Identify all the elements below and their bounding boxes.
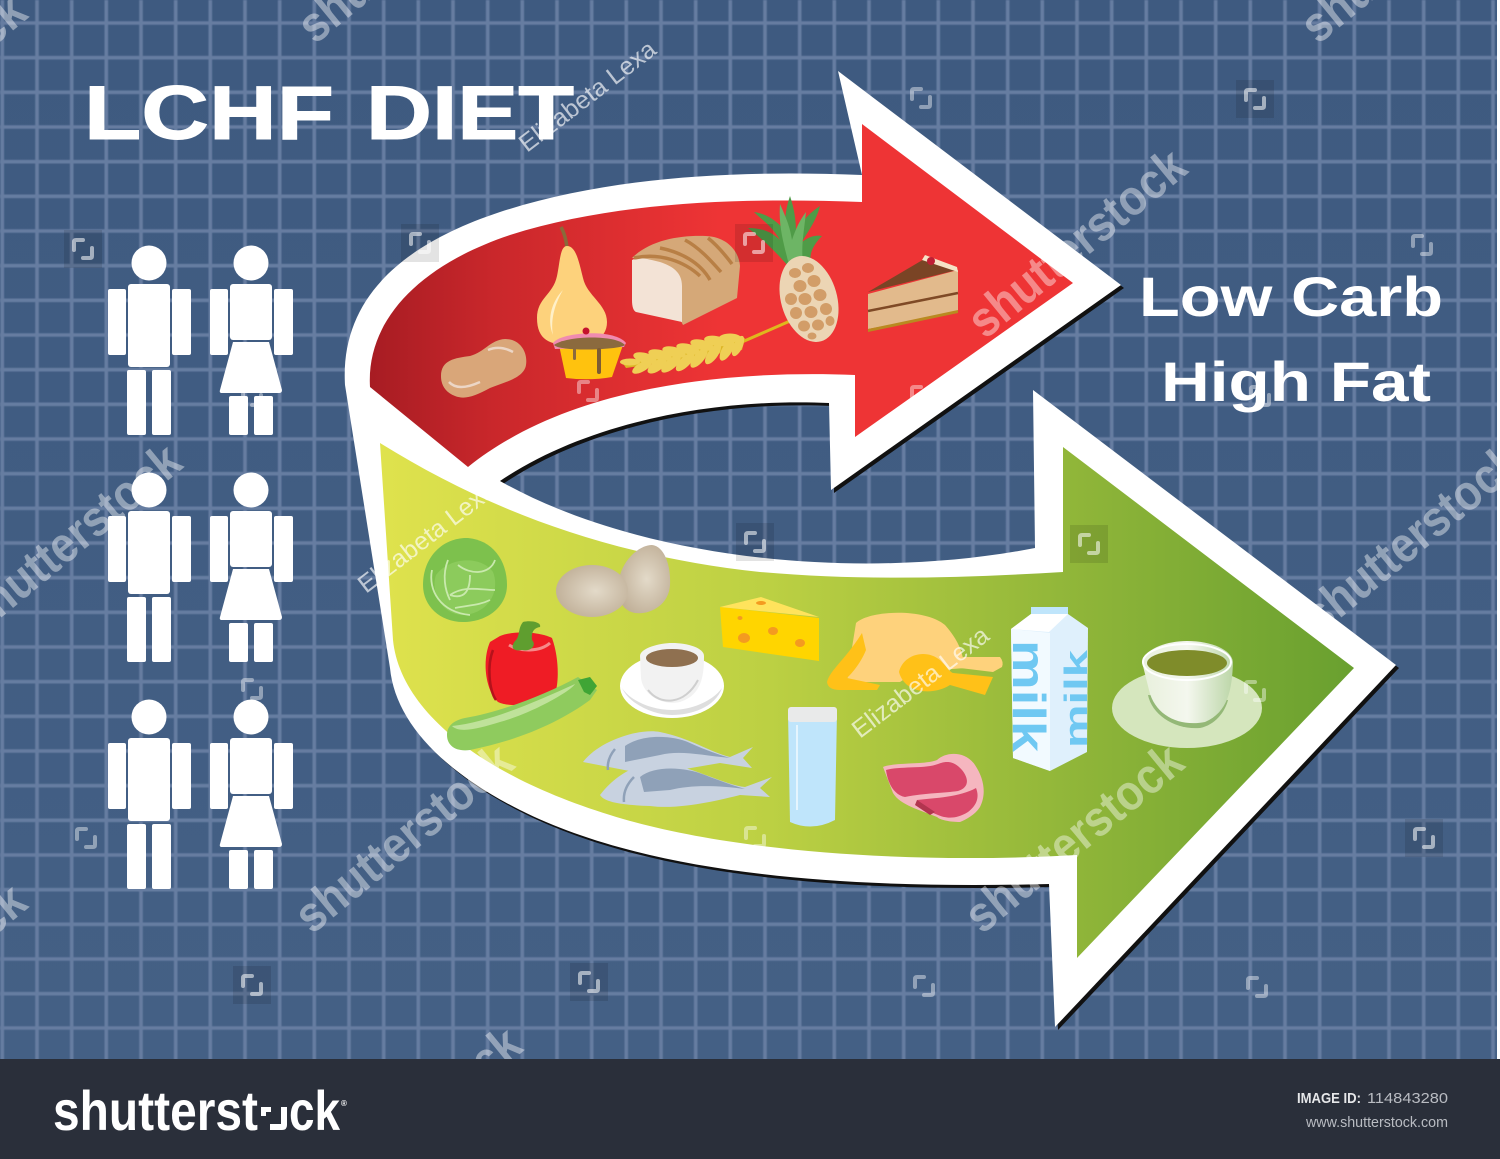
watermarks: Elizabeta Lexa [353,476,501,599]
food: milk carton: milk [1058,650,1094,748]
food: wheat [620,321,790,376]
red arrow: low carb foods [370,124,1073,467]
food: cheese [720,597,819,661]
food: bread [632,236,740,325]
woman, row 2 [210,472,293,662]
title: DIET [366,71,574,156]
food: steak [883,754,984,822]
man, row 2 [108,472,191,662]
food: eggs [556,545,670,617]
watermarks: ck [458,1015,532,1090]
title [84,71,574,156]
food: zucchini [447,677,597,750]
food: pear [537,227,607,345]
image id: IMAGE ID: [1297,1090,1361,1107]
food: glass of water [788,707,837,827]
website: www.shutterstock.com [1305,1115,1448,1131]
shutterstock logo: ® [341,1099,347,1108]
woman, row 3 [210,700,293,889]
title: LCHF [84,71,334,156]
subtitle: Low Carb: Low Carb [1139,265,1443,328]
people icons [108,246,293,889]
milk labels: milk [1003,640,1055,753]
watermarks: Elizabeta Lexa [847,621,995,744]
green arrow: high fat foods [380,443,1354,958]
food: chicken [827,613,1003,695]
footer bar [0,1059,1500,1159]
shutterstock logo: ck [289,1079,341,1142]
arrow outlines: white band with black shadow [345,71,1399,1030]
watermarks: shutterstock [953,732,1194,944]
footer bar: 114843280 [1367,1090,1448,1107]
watermarks: Elizabeta Lexa [514,35,662,158]
food: potato [441,339,526,398]
food: pineapple [748,196,848,349]
food: milk carton [1003,607,1094,771]
watermarks: shutterstock [283,732,524,944]
watermarks: shutterstock [956,137,1197,349]
food: cake [868,255,958,332]
man, row 3 [108,700,191,889]
woman, row 1 [210,246,293,435]
food: cabbage [423,538,507,622]
food: coffee cup [620,643,724,718]
man, row 1 [108,246,191,435]
subtitle: High Fat: High Fat [1161,350,1431,413]
shutterstock logo: shutterst [53,1079,258,1142]
food: fish [583,731,772,807]
food: green tea cup [1112,641,1262,748]
food: bell pepper [486,621,558,705]
food: muffin [553,328,626,379]
